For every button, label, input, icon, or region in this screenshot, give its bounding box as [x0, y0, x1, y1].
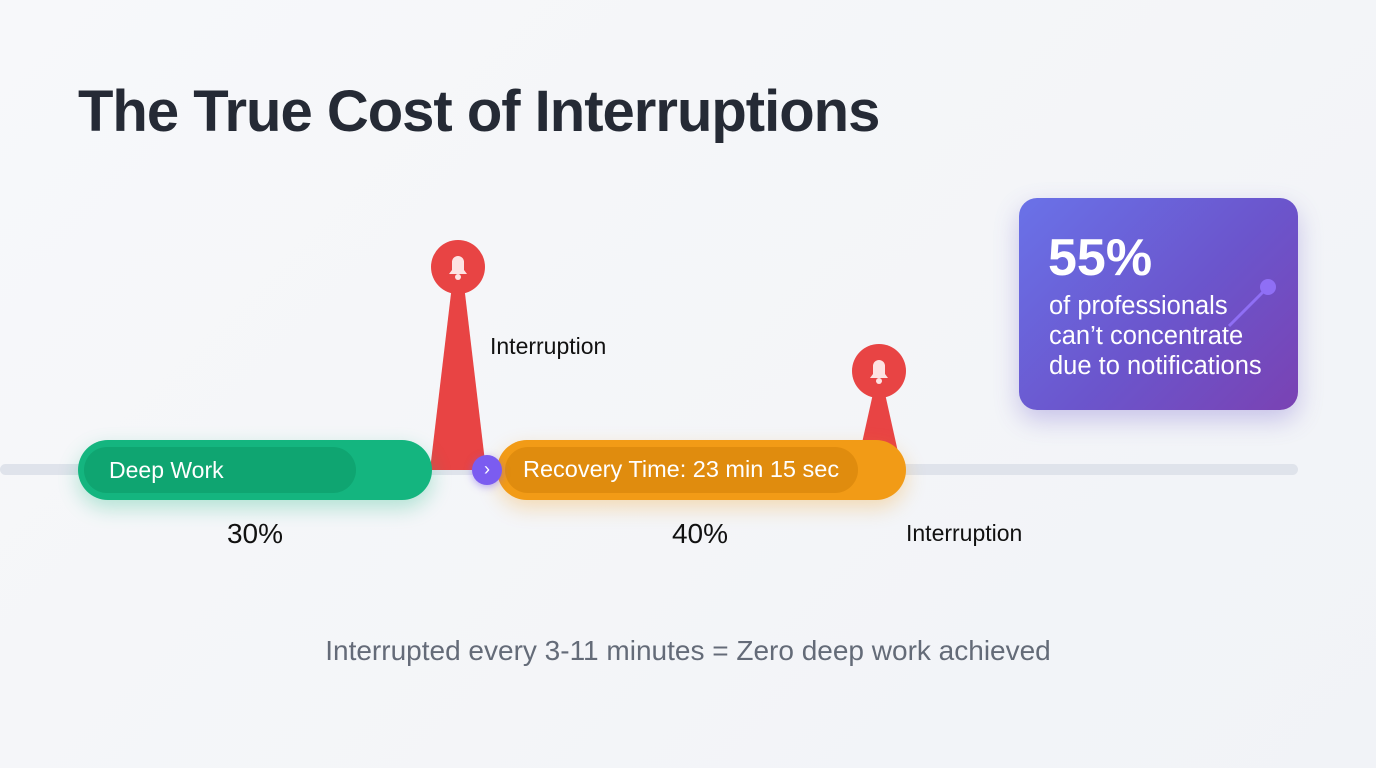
timeline track: [0, 464, 1298, 475]
label: deep work: Deep Work: [109, 457, 224, 483]
interruption spike 1: [431, 240, 485, 470]
label: 30%: 30%: [227, 518, 283, 549]
title: The True Cost of Interruptions: [78, 79, 879, 144]
recovery bar: [497, 440, 906, 500]
stat description: of professionals: [1049, 292, 1228, 320]
stat description: [1049, 292, 1262, 380]
deep work bar: [78, 440, 432, 500]
interruption spike 2: [852, 344, 906, 449]
stat description: due to notifications: [1049, 352, 1262, 380]
stat description: can’t concentrate: [1049, 322, 1243, 350]
stat card: [1019, 198, 1298, 410]
icon: chevron: [472, 455, 502, 485]
label: recovery time: Recovery Time: 23 min 15 sec: [523, 456, 839, 482]
icon: chevron: ›: [484, 459, 490, 479]
label: 40%: 40%: [672, 518, 728, 549]
label: interruption 2: Interruption: [906, 520, 1022, 546]
stat number: 55%: [1048, 229, 1152, 287]
label: interruption 1: Interruption: [490, 333, 606, 359]
footer text: Interrupted every 3-11 minutes = Zero deep work achieved: [325, 635, 1051, 666]
